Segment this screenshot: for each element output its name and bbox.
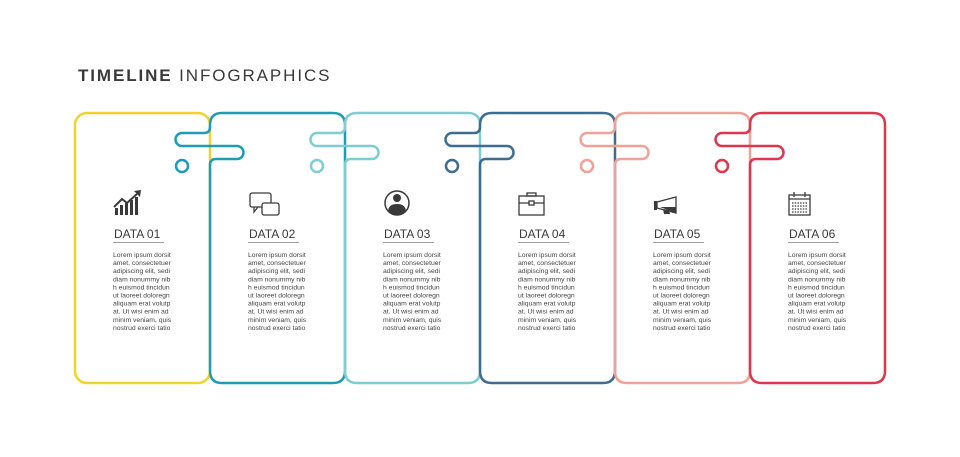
text block 1: minim veniam, quis	[113, 317, 172, 324]
text block 5: h euismod tincidun	[653, 284, 710, 291]
text block 1: nostrud exerci tatio	[113, 325, 171, 332]
text block 4: amet, consectetuer	[518, 260, 577, 267]
text block 1: ut laoreet doloregn	[113, 292, 170, 300]
icon: chat	[250, 193, 279, 215]
text block 4: Lorem ipsum dorsit	[518, 252, 576, 259]
text block 5: diam nonummy nib	[653, 276, 711, 283]
text block 6: minim veniam, quis	[788, 317, 847, 324]
text block 2: adipiscing elit, sedi	[248, 268, 306, 275]
text block 3: DATA 03	[384, 227, 431, 241]
text block 2: Lorem ipsum dorsit	[248, 252, 306, 259]
icon: person	[385, 191, 409, 215]
text block 5: Lorem ipsum dorsit	[653, 252, 711, 259]
text block 3: minim veniam, quis	[383, 317, 442, 324]
text block 4: diam nonummy nib	[518, 276, 576, 283]
text block 3: nostrud exerci tatio	[383, 325, 441, 332]
title: TIMELINE INFOGRAPHICS	[78, 66, 331, 85]
text block 2: aliquam erat volutp	[248, 301, 306, 308]
text block 5: ut laoreet doloregn	[653, 292, 710, 300]
text block 4: at. Ut wisi enim ad	[518, 309, 574, 316]
text block 5: amet, consectetuer	[653, 260, 712, 267]
text block 1: at. Ut wisi enim ad	[113, 309, 169, 316]
text block 4: nostrud exerci tatio	[518, 325, 576, 332]
text block 2	[248, 227, 307, 332]
text block 3: amet, consectetuer	[383, 260, 442, 267]
text block 6: DATA 06	[789, 227, 836, 241]
text block 4	[518, 227, 577, 332]
text block 3: adipiscing elit, sedi	[383, 268, 441, 275]
text block 5: minim veniam, quis	[653, 317, 712, 324]
panel 2 outline	[176, 113, 345, 383]
data labels and text	[113, 227, 847, 332]
text block 3: at. Ut wisi enim ad	[383, 309, 439, 316]
text block 6: amet, consectetuer	[788, 260, 847, 267]
text block 6	[788, 227, 847, 332]
text block 3: ut laoreet doloregn	[383, 292, 440, 300]
text block 2: at. Ut wisi enim ad	[248, 309, 304, 316]
text block 5: DATA 05	[654, 227, 701, 241]
text block 3: Lorem ipsum dorsit	[383, 252, 441, 259]
text block 3: aliquam erat volutp	[383, 301, 441, 308]
text block 6: diam nonummy nib	[788, 276, 846, 283]
text block 3: h euismod tincidun	[383, 284, 440, 291]
icon: briefcase	[519, 193, 544, 215]
text block 2: amet, consectetuer	[248, 260, 307, 267]
text block 1: diam nonummy nib	[113, 276, 171, 283]
text block 5: aliquam erat volutp	[653, 301, 711, 308]
text block 2: minim veniam, quis	[248, 317, 307, 324]
text block 6: at. Ut wisi enim ad	[788, 309, 844, 316]
text block 4: adipiscing elit, sedi	[518, 268, 576, 275]
panel 5 outline	[580, 113, 750, 383]
text block 4: DATA 04	[519, 227, 566, 241]
text block 2: diam nonummy nib	[248, 276, 306, 283]
text block 4: aliquam erat volutp	[518, 301, 576, 308]
text block 4: h euismod tincidun	[518, 284, 575, 291]
text block 4: ut laoreet doloregn	[518, 292, 575, 300]
text block 2: ut laoreet doloregn	[248, 292, 305, 300]
panel 1 outline	[75, 113, 210, 383]
text block 6: Lorem ipsum dorsit	[788, 252, 846, 259]
text block 1: adipiscing elit, sedi	[113, 268, 171, 275]
icon: chart	[114, 190, 141, 215]
icon: megaphone	[654, 197, 676, 214]
text block 6: aliquam erat volutp	[788, 301, 846, 308]
text block 5	[653, 227, 712, 332]
text block 6: nostrud exerci tatio	[788, 325, 846, 332]
text block 1	[113, 227, 172, 332]
text block 2: nostrud exerci tatio	[248, 325, 306, 332]
text block 1: DATA 01	[114, 227, 161, 241]
text block 5: adipiscing elit, sedi	[653, 268, 711, 275]
text block 1: h euismod tincidun	[113, 284, 170, 291]
text block 3	[383, 227, 442, 332]
panel 3 outline	[311, 113, 480, 383]
text block 1: amet, consectetuer	[113, 260, 172, 267]
panel 4 outline	[446, 113, 615, 383]
icon: calendar	[789, 192, 810, 215]
text block 1: Lorem ipsum dorsit	[113, 252, 171, 259]
text block 2: h euismod tincidun	[248, 284, 305, 291]
panel 6 outline	[716, 113, 885, 383]
text block 4: minim veniam, quis	[518, 317, 577, 324]
text block 3: diam nonummy nib	[383, 276, 441, 283]
text block 5: at. Ut wisi enim ad	[653, 309, 709, 316]
text block 1: aliquam erat volutp	[113, 301, 171, 308]
text block 6: adipiscing elit, sedi	[788, 268, 846, 275]
text block 2: DATA 02	[249, 227, 296, 241]
text block 6: ut laoreet doloregn	[788, 292, 845, 300]
text block 6: h euismod tincidun	[788, 284, 845, 291]
text block 5: nostrud exerci tatio	[653, 325, 711, 332]
